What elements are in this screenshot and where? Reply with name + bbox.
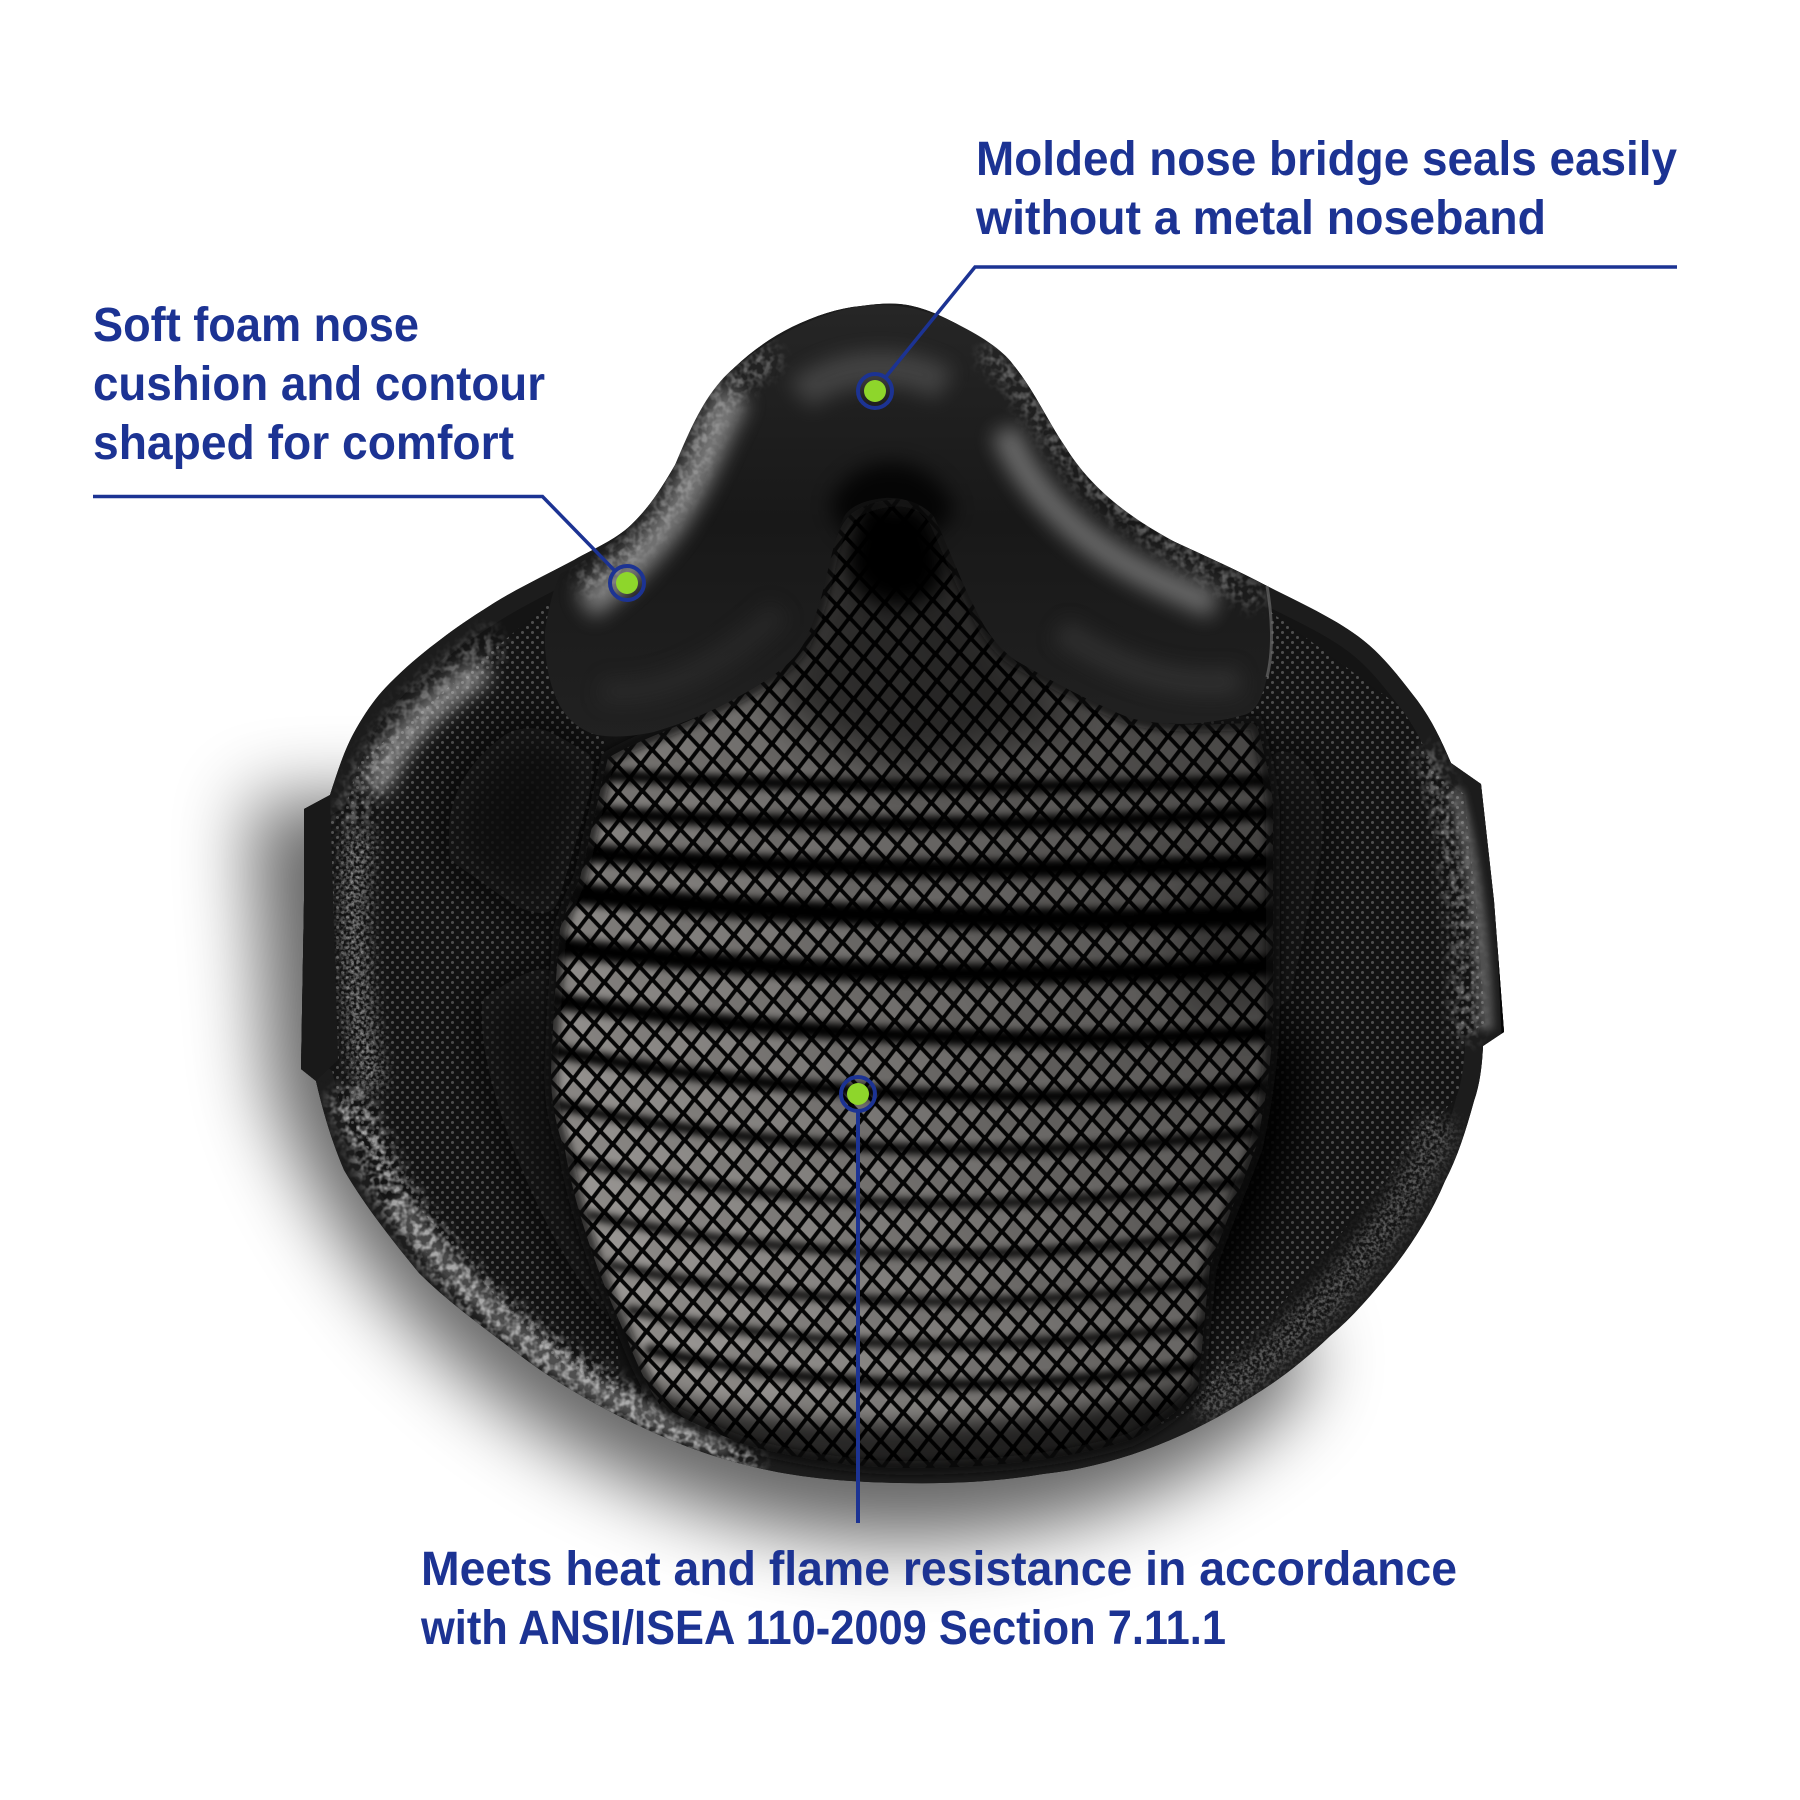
foam textured edge left [580, 352, 775, 585]
foam highlight left [585, 395, 735, 605]
rim speckle lower left [345, 1090, 760, 1455]
callout text: cushion and contour [93, 358, 545, 411]
callout: molded nose bridge [858, 133, 1677, 408]
rim highlight upper left [375, 670, 485, 790]
callout text [93, 299, 545, 470]
callout text: Soft foam nose [93, 299, 419, 352]
marker dot [841, 1077, 875, 1111]
left ear tab [301, 795, 338, 1081]
marker dot [610, 566, 644, 600]
mesh bottom darkening [640, 1380, 1200, 1490]
side panel dark felt left lower [480, 950, 640, 1340]
callout text: shaped for comfort [93, 417, 514, 470]
side panel texture left [300, 560, 620, 1440]
right ear tab [1497, 942, 1504, 1034]
infographic canvas [93, 140, 1677, 1645]
leader line [93, 496, 615, 571]
rim dark base [301, 304, 1504, 1483]
rim highlight right side [1455, 790, 1486, 1030]
mesh edge softening [551, 500, 1273, 1468]
mesh right shading [1180, 880, 1290, 1010]
mask photo illustration [280, 290, 1520, 1500]
mesh nose shadow [760, 505, 1090, 771]
side panel texture right [1150, 560, 1504, 1460]
leader line [885, 267, 1677, 378]
callout text [975, 133, 1677, 245]
rim lower right [1200, 1120, 1442, 1410]
callout: heat and flame resistance [420, 1077, 1457, 1655]
callout text: with ANSI/ISEA 110-2009 Section 7.11.1 [420, 1602, 1226, 1655]
foam textured edge right [985, 350, 1262, 600]
marker dot [858, 374, 892, 408]
rim speckle upper left [350, 640, 500, 830]
callout text: without a metal noseband [975, 192, 1546, 245]
callout text [420, 1543, 1457, 1655]
foam lower lift [1060, 630, 1240, 683]
callout text: Molded nose bridge seals easily [976, 133, 1677, 186]
filter mesh panel [540, 490, 1290, 1490]
foam highlight right [1005, 430, 1215, 605]
mask drop shadow [250, 800, 1308, 1540]
foam bridge highlight [800, 368, 945, 395]
rim speckle right side [1425, 750, 1465, 1040]
leader line [856, 1112, 860, 1523]
rim speckle left side [354, 830, 372, 1090]
mesh dark folds [545, 772, 1280, 1384]
foam nose cushion [545, 305, 1272, 736]
mesh shading [540, 490, 1290, 1490]
rim highlight lower left [395, 1200, 730, 1445]
callout text: Meets heat and flame resistance in accordance [421, 1543, 1457, 1596]
side panel dark felt right [1268, 726, 1344, 1022]
side panel dark felt left upper [448, 720, 600, 930]
callout: soft foam nose cushion [93, 299, 644, 600]
foam center dark [830, 462, 955, 535]
mask body [280, 290, 1520, 1500]
